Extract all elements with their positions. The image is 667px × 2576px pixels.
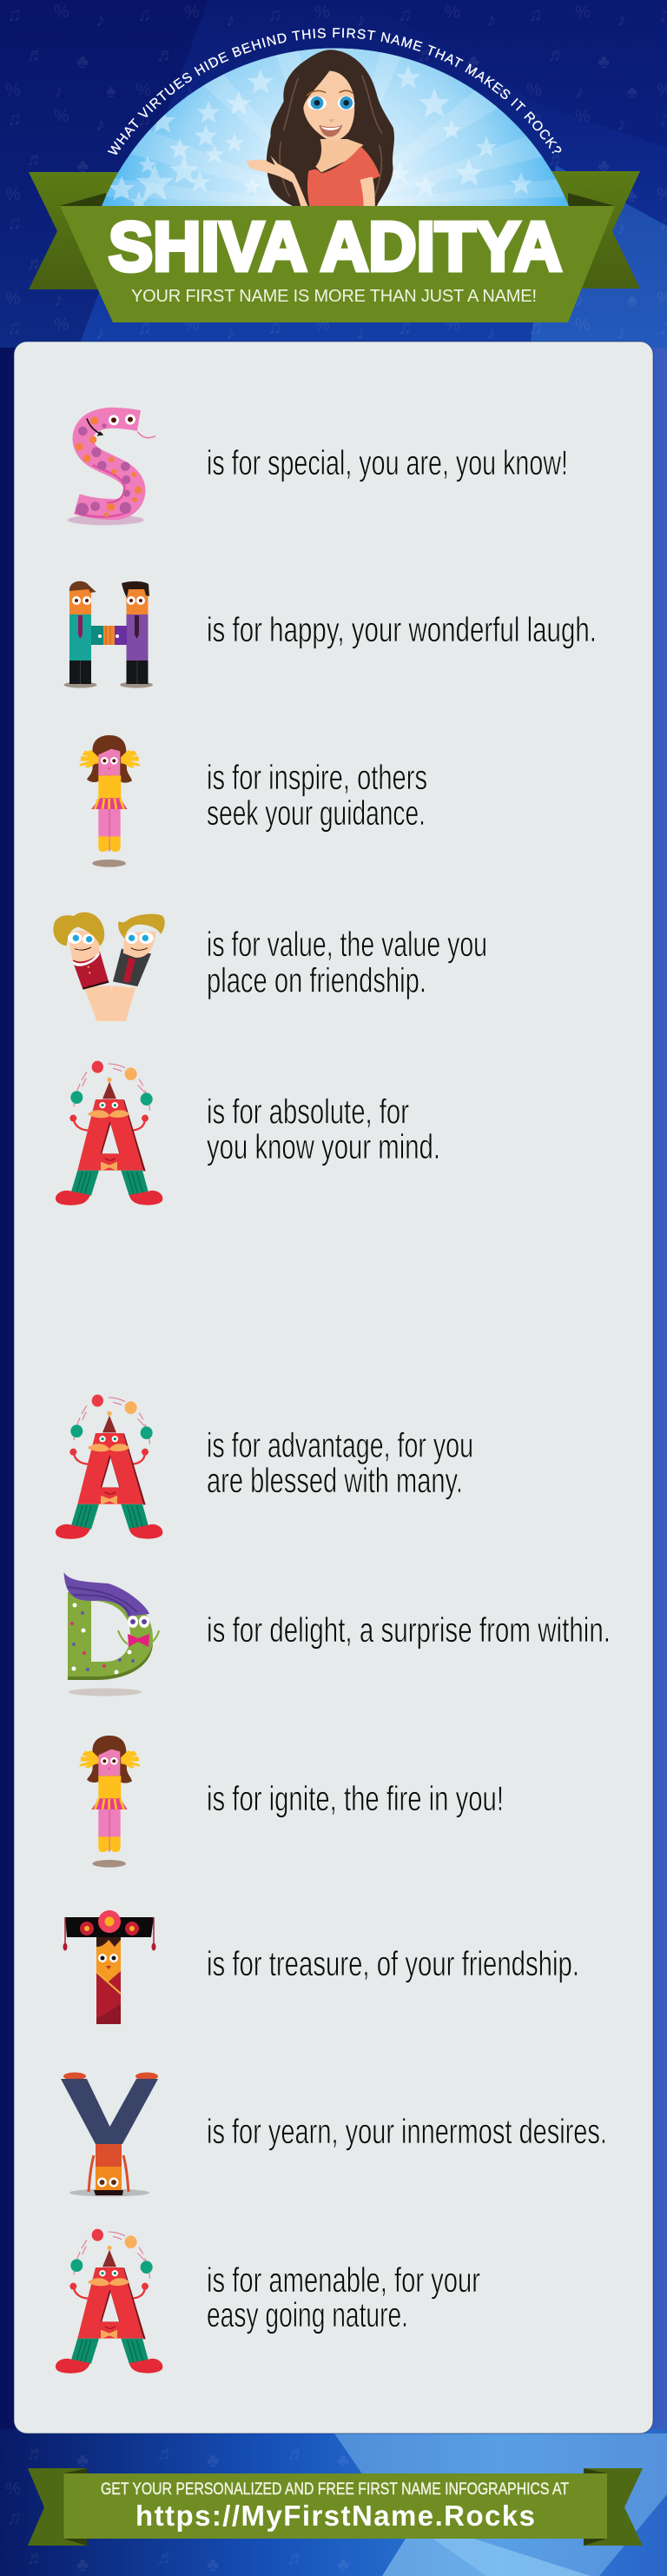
icon: finger puppets V [53,913,165,1021]
row: V [53,913,487,1021]
text: A amenable: easy going nature. [207,2296,408,2334]
text: I: is for inspire, others [207,759,427,797]
text: A amenable [207,2261,480,2334]
panel: letters card [14,342,653,2433]
icon: juggler A [56,1061,162,1205]
subtitle: YOUR FIRST NAME IS MORE THAN JUST A NAME! [131,287,537,306]
icon: juggler A [56,2229,162,2374]
text: V: place on friendship. [207,961,426,999]
text: A advantage: is for advantage, for you [207,1427,473,1465]
header ribbon back pieces [29,171,640,289]
text: V [207,926,487,999]
row: A advantage [56,1395,473,1539]
sunburst dome [102,48,569,206]
text: A absolute [207,1093,440,1166]
text: A advantage: are blessed with many. [207,1462,463,1500]
text: V: is for value, the value you [207,926,487,964]
icon: green D with purple hair [64,1572,159,1696]
text: I [207,759,427,833]
row: Y [61,2072,607,2197]
row: H [64,581,597,688]
text: A amenable: is for amenable, for your [207,2261,480,2300]
text: A absolute: is for absolute, for [207,1093,409,1132]
text: A advantage [207,1427,473,1500]
icon: juggler A [56,1395,162,1539]
header ribbon front [60,206,615,322]
icon: cheerleader I [79,735,140,867]
text: A absolute: you know your mind. [207,1128,440,1166]
footer url: https://MyFirstName.Rocks [135,2500,535,2532]
row: A absolute [56,1061,440,1205]
icon: cheerleader I [79,1736,140,1868]
curved tagline: WHAT VIRTUES HIDE BEHIND THIS FIRST NAME THAT MAKES IT ROCK? [108,28,561,155]
text: I: seek your guidance. [207,794,426,833]
woman character [246,50,394,207]
row: I [79,735,427,867]
row: I ignite [79,1736,504,1868]
icon: T with flowered hat [63,1910,156,2024]
icon: two men H [64,581,153,688]
icon: handstand Y [61,2072,158,2197]
row: D [64,1572,611,1696]
icon: pink snake S [68,415,155,525]
footer line: GET YOUR PERSONALIZED AND FREE FIRST NAME INFOGRAPHICS AT [101,2480,569,2499]
row: T [63,1910,579,2024]
text: I ignite: is for ignite, the fire in you! [207,1780,504,1818]
row: A amenable [56,2229,480,2374]
row: S [68,415,568,525]
title: SHIVA ADITYA [109,208,562,285]
footer ribbon [28,2468,643,2546]
